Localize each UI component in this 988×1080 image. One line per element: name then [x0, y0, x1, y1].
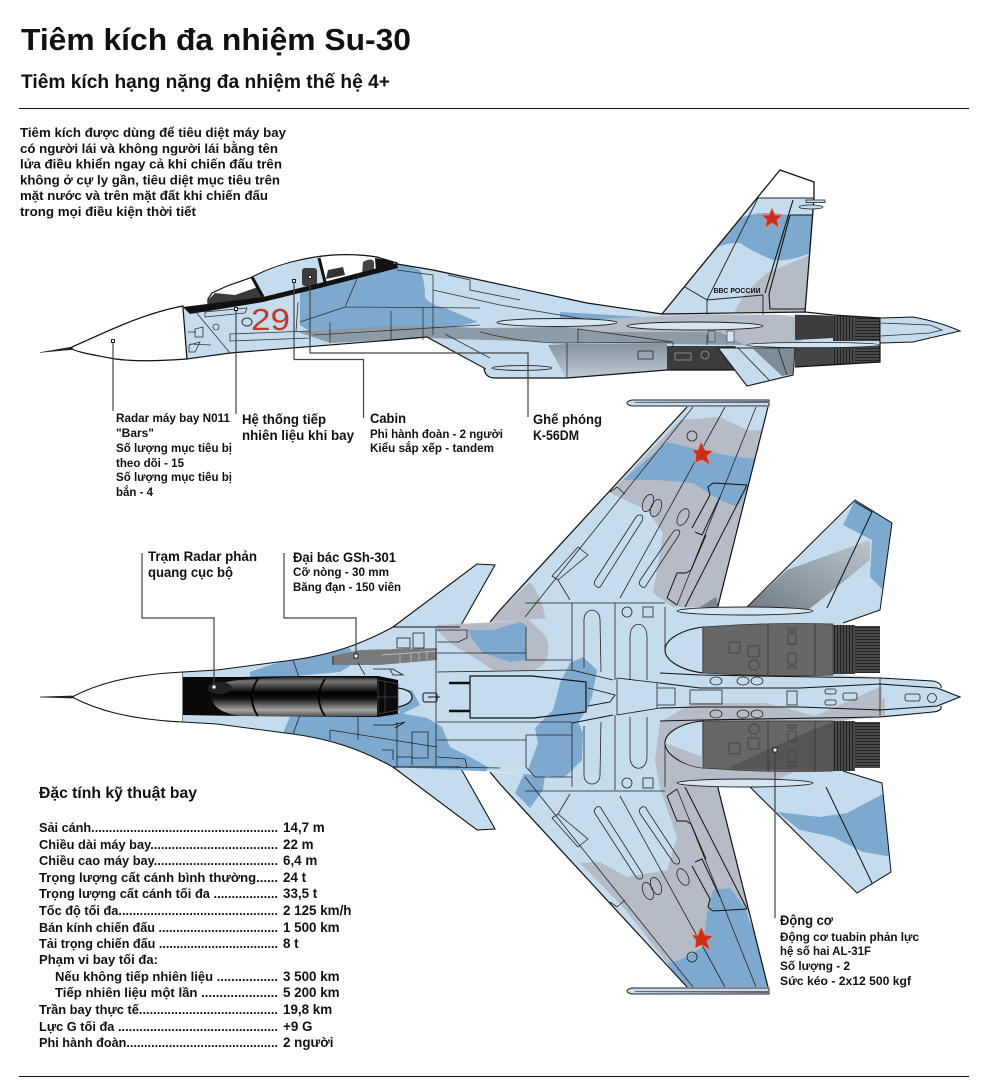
label: cabin: Phi hành đoàn - 2 người: [370, 427, 503, 441]
leader: ejection seat: [310, 277, 528, 417]
specs table: Trọng lượng cất cánh bình thường......: [39, 870, 278, 885]
specs table: Chiều cao máy bay...................................: [39, 853, 278, 868]
tail cone: [880, 317, 960, 343]
label: EO radar station: Trạm Radar phản: [148, 549, 257, 564]
specs table: Sải cánh.....................................................: [39, 820, 278, 835]
label: radar: Số lượng mục tiêu bị: [116, 470, 232, 484]
label: EO radar station: [148, 549, 257, 580]
specs table: Tiếp nhiên liệu một lần .....................: [55, 985, 278, 1000]
label: refuelling: Hệ thống tiếp: [242, 412, 326, 427]
vertical tail: [662, 169, 826, 315]
specs table: [39, 820, 351, 1050]
label: cabin: Kiểu sắp xếp - tandem: [370, 440, 494, 455]
leader: EO radar: [142, 553, 214, 687]
leader lines: [113, 277, 775, 918]
gun bay: [332, 648, 437, 665]
specs table: Nếu không tiếp nhiên liệu .................: [55, 969, 278, 984]
specs table: Tốc độ tối đa.............................................: [39, 903, 278, 918]
label: engine: [780, 913, 919, 988]
label: radar: "Bars": [116, 426, 154, 440]
leader: engine: [774, 750, 776, 918]
label: seat: K-56DM: [533, 428, 579, 443]
description text: có người lái và không người lái bằng tên: [20, 141, 278, 156]
specs table: Trọng lượng cất cánh tối đa ..................: [39, 886, 278, 901]
specs table: 6,4 m: [283, 853, 317, 868]
description text: trong mọi điều kiện thời tiết: [20, 204, 197, 219]
label: seat: [533, 412, 602, 443]
nacelle pods: [677, 607, 813, 615]
specs table: 3 500 km: [283, 969, 340, 984]
leader: refuelling: [235, 309, 237, 414]
upper wing panel lines: [525, 407, 756, 617]
tail marking: ВВС РОССИИ: [714, 288, 760, 295]
specs table: 14,7 m: [283, 820, 325, 835]
external pods: [497, 318, 617, 326]
label: cannon: Đại bác GSh-301: [293, 550, 396, 565]
specs table: Lực G tối đa .............................................: [39, 1019, 278, 1034]
label: refuelling: nhiên liệu khi bay: [242, 428, 354, 443]
specs table: 1 500 km: [283, 920, 340, 935]
cockpit from above: [183, 676, 412, 717]
label: cannon: Băng đạn - 150 viên: [293, 580, 401, 594]
label: engine: Sức kéo - 2x12 500 kgf: [780, 974, 912, 988]
stabilizer: [718, 348, 795, 386]
specs table: Phi hành đoàn...........................................: [39, 1035, 278, 1050]
top view aircraft: [40, 400, 960, 994]
label: engine: Số lượng - 2: [780, 959, 850, 973]
specs table: 33,5 t: [283, 886, 318, 901]
subtitle: Tiêm kích hạng nặng đa nhiệm thế hệ 4+: [21, 71, 390, 93]
stabilizer lower: [750, 771, 892, 893]
description text: không ở cự ly gần, tiêu diệt mục tiêu trên: [20, 172, 280, 188]
wings: [490, 400, 775, 994]
label: cabin: Cabin: [370, 411, 406, 426]
side view aircraft: [40, 165, 960, 386]
label: cannon: [293, 550, 401, 594]
heading: flight specs: Đặc tính kỹ thuật bay: [39, 785, 197, 802]
description text: [20, 125, 287, 219]
specs table: Phạm vi bay tối đa:: [39, 952, 158, 967]
specs table: 5 200 km: [283, 985, 340, 1000]
leader: radar: [112, 341, 114, 411]
number 29: 29: [251, 302, 290, 337]
body camouflage: [250, 618, 885, 790]
specs table: 8 t: [283, 936, 299, 951]
label: radar: theo dõi - 15: [116, 456, 184, 470]
leader: cabin: [294, 281, 364, 418]
specs table: +9 G: [283, 1019, 312, 1034]
canards: [393, 564, 495, 830]
specs table: 22 m: [283, 837, 314, 852]
specs table: Trần bay thực tế.......................................: [39, 1002, 278, 1017]
nose radome: [72, 672, 183, 722]
engine nacelle upper: [665, 623, 880, 676]
label: radar: Radar máy bay N011: [116, 411, 230, 425]
nose probe: [40, 347, 72, 352]
label: cannon: Cỡ nòng - 30 mm: [293, 565, 389, 579]
label: cabin: [370, 411, 503, 455]
lower wing panel lines: [525, 777, 756, 987]
icon: red star lower wing: [692, 927, 713, 950]
specs table: Tải trọng chiến đấu ..................................: [39, 936, 278, 951]
label: engine: Động cơ tuabin phản lực: [780, 930, 919, 944]
label: EO radar station: quang cục bộ: [148, 565, 233, 580]
label: refuelling: [242, 412, 354, 443]
specs table: Bán kính chiến đấu ..................................: [39, 920, 278, 935]
label: radar: [116, 411, 232, 499]
stabilizer upper: [747, 500, 895, 623]
specs table: 24 t: [283, 870, 307, 885]
tail spine: [660, 673, 960, 721]
description text: lửa điều khiển ngay cả khi chiến đấu trên: [20, 156, 282, 172]
specs table: 2 125 km/h: [283, 903, 351, 918]
specs table: Chiều dài máy bay....................................: [39, 837, 278, 852]
label: engine: hệ số hai AL-31F: [780, 944, 871, 958]
fuselage: [183, 264, 880, 378]
label: seat: Ghế phóng: [533, 412, 602, 427]
nose probe: [40, 696, 72, 698]
camouflage and panels: [298, 262, 880, 380]
specs table: 2 người: [283, 1035, 333, 1050]
central fuel tunnel: [423, 670, 660, 723]
leader: cannon: [284, 553, 356, 656]
title: Tiêm kích đa nhiệm Su-30: [21, 22, 411, 57]
central body: [183, 607, 960, 787]
fuselage panel lines: [293, 603, 936, 790]
label: engine: Động cơ: [780, 913, 833, 928]
description text: Tiêm kích được dùng để tiêu diệt máy bay: [20, 125, 287, 140]
label: radar: bắn - 4: [116, 484, 153, 499]
specs table: 19,8 km: [283, 1002, 332, 1017]
canopy: [208, 255, 397, 306]
nose radome: [72, 306, 187, 361]
label: radar: Số lượng mục tiêu bị: [116, 441, 232, 455]
description text: mặt nước và trên mặt đất khi chiến đấu: [20, 188, 268, 203]
icon: red star on tail: [761, 208, 783, 228]
icon: red star upper wing: [692, 442, 713, 465]
engine nacelle lower: [665, 721, 880, 772]
